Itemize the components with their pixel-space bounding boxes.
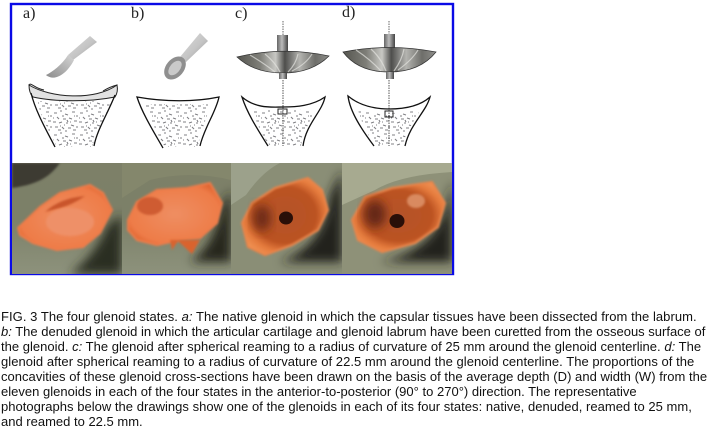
caption text: b: The denuded glenoid in which the articular cartilage and glenoid labrum have been curetted from the osseous surface of — [1, 324, 705, 339]
caption text: concavities of these glenoid cross-sections have been drawn on the basis of the average depth (D) and width (W) from the — [1, 369, 707, 384]
label c): c) — [235, 5, 247, 22]
caption text — [1, 309, 707, 429]
blue figure frame — [11, 4, 453, 274]
caption text: glenoid after spherical reaming to a radius of curvature of 22.5 mm around the glenoid centerline. The proportions of the — [1, 354, 694, 369]
icon: scalpel — [46, 36, 97, 78]
caption text: and reamed to 22.5 mm. — [1, 414, 143, 429]
cross-section d: reamed to 22.5 mm — [348, 80, 430, 146]
label d): d) — [342, 4, 355, 21]
figure: four glenoid states — [10, 2, 454, 276]
photo b: denuded glenoid — [122, 163, 231, 274]
photo c: reamed to 25 mm — [231, 163, 342, 274]
label b): b) — [131, 5, 144, 22]
cross-section b: denuded glenoid — [137, 97, 219, 148]
label a): a) — [23, 5, 35, 22]
caption text: FIG. 3 The four glenoid states. a: The native glenoid in which the capsular tissues have been dissected from the labrum. — [1, 309, 697, 324]
reamer d — [343, 21, 436, 79]
icon: curette — [160, 33, 208, 84]
photo a: native glenoid — [12, 163, 122, 274]
photo d: reamed to 22.5 mm — [342, 163, 452, 274]
caption text: eleven glenoids in each of the four states in the anterior-to-posterior (90° to 270°) direction. The representative — [1, 384, 637, 399]
cross-section c: reamed to 25 mm — [242, 80, 325, 146]
caption text: photographs below the drawings show one of the glenoids in each of its four states: native, denuded, reamed to 25 mm, — [1, 399, 692, 414]
reamer c — [237, 21, 329, 79]
cross-section a: native glenoid — [29, 84, 117, 147]
caption text: the glenoid. c: The glenoid after spherical reaming to a radius of curvature of 25 mm around the glenoid centerline. d: The — [1, 339, 701, 354]
